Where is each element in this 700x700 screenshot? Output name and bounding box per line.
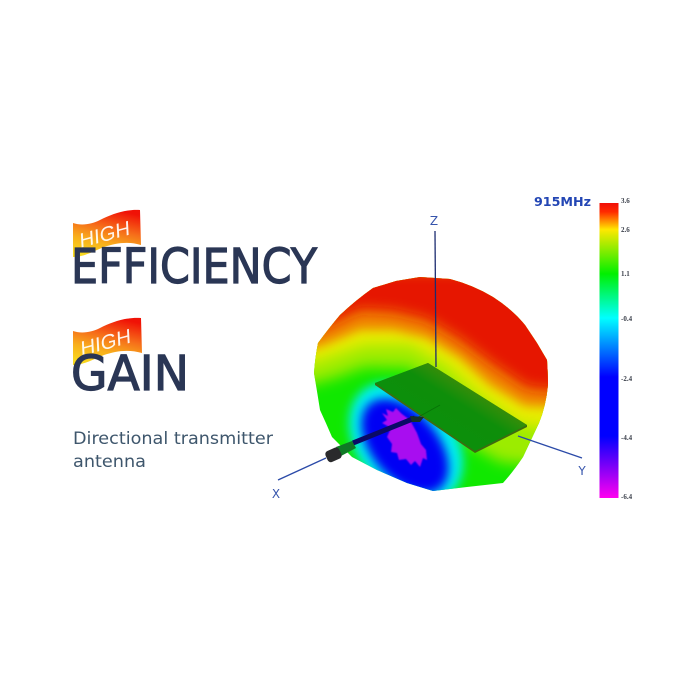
radiation pattern lobe bbox=[314, 277, 548, 491]
antenna plate bbox=[375, 363, 527, 453]
description: antenna bbox=[73, 452, 146, 472]
cable bbox=[353, 418, 415, 443]
flag: high efficiency bbox=[73, 210, 141, 257]
description bbox=[73, 429, 273, 472]
color scale labels: -2.4 bbox=[621, 375, 633, 383]
color scale labels bbox=[621, 197, 633, 501]
heading: gain: GAIN bbox=[71, 346, 189, 402]
purple low-gain region bbox=[382, 408, 427, 467]
color scale labels: -6.4 bbox=[621, 493, 633, 501]
color scale labels: -4.4 bbox=[621, 434, 633, 442]
title: frequency: 915MHz bbox=[534, 195, 591, 209]
axis: y bbox=[518, 436, 586, 478]
heading: efficiency: EFFICIENCY bbox=[71, 239, 318, 295]
connector bbox=[324, 416, 424, 463]
color scale labels: 2.6 bbox=[621, 226, 630, 234]
infographic bbox=[73, 197, 632, 499]
axis: x: X bbox=[272, 487, 280, 501]
color scale bar bbox=[600, 203, 618, 498]
color scale labels: 3.6 bbox=[621, 197, 630, 205]
flag: high efficiency: HIGH bbox=[79, 217, 130, 253]
axis: x bbox=[272, 458, 326, 501]
flag: high gain: HIGH bbox=[80, 325, 131, 361]
antenna bbox=[324, 363, 527, 463]
color scale labels: 1.1 bbox=[621, 270, 630, 278]
flag: high gain bbox=[73, 318, 142, 365]
axis: y: Y bbox=[577, 464, 586, 478]
color scale labels: -0.4 bbox=[621, 315, 633, 323]
description: Directional transmitter bbox=[73, 429, 273, 449]
axis: z: Z bbox=[430, 214, 438, 228]
